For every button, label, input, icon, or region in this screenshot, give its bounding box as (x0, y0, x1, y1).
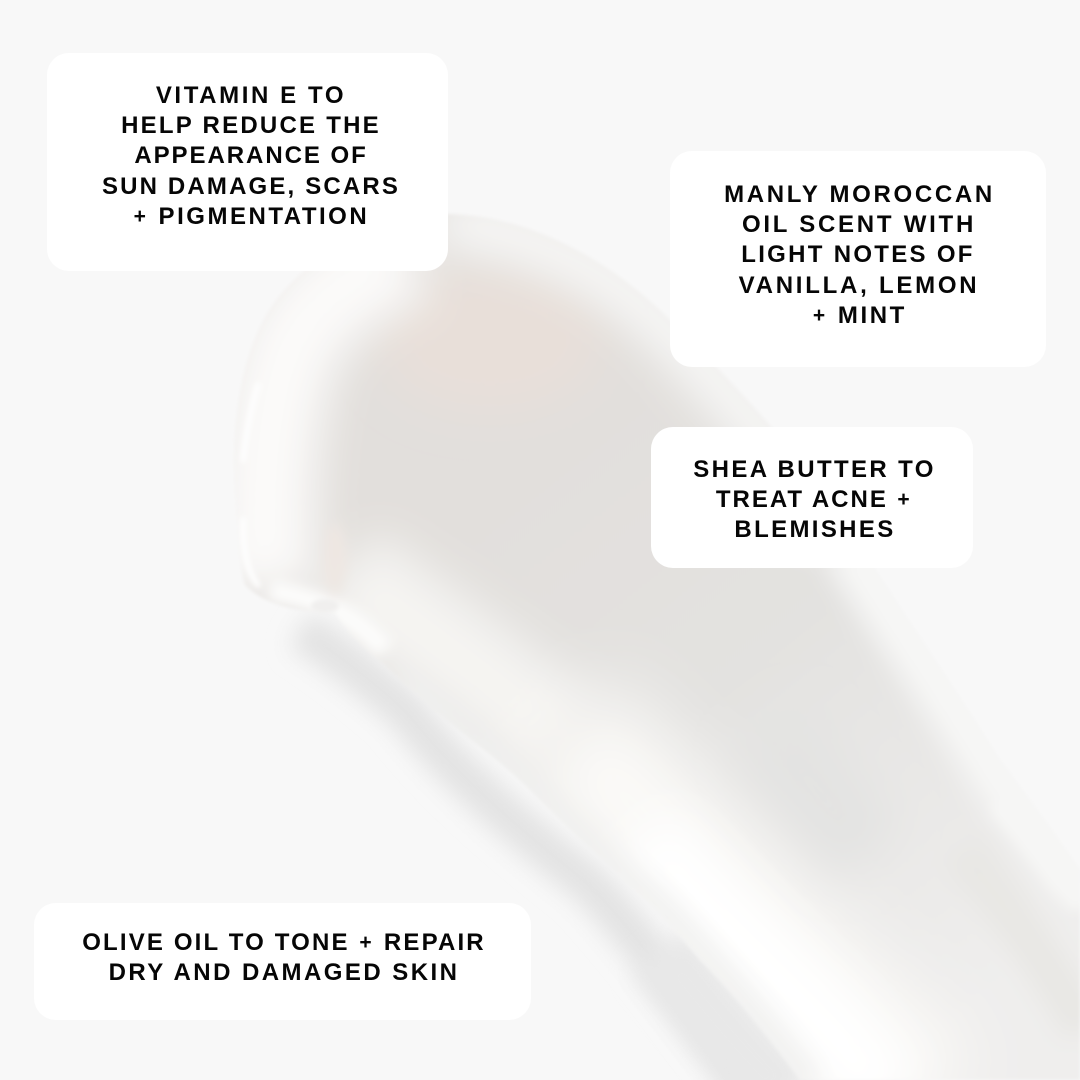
white highlight band (676, 876, 762, 970)
cream swatch (246, 214, 1080, 1080)
card: olive oil (34, 903, 531, 1020)
grey ridge far right (960, 850, 1080, 1030)
card: vitamin E: SUN DAMAGE, SCARS (102, 173, 400, 200)
card: vitamin E: VITAMIN E TO (156, 82, 346, 109)
card: vitamin E: APPEARANCE OF (134, 142, 368, 169)
card: shea butter (651, 427, 973, 568)
body base colour (200, 190, 1080, 1080)
wide pale wash along band (560, 730, 920, 1080)
card: shea butter: + (897, 488, 910, 511)
lighter lower lobe (345, 570, 560, 740)
card: Moroccan oil scent: + (813, 304, 825, 327)
lip lobe white (270, 590, 385, 650)
light wash lower right (1000, 800, 1080, 905)
lower lip gloss (249, 571, 258, 586)
card: Moroccan oil scent: MANLY MOROCCAN (724, 181, 995, 208)
card: vitamin E (47, 53, 448, 271)
cast shadow below swatch (300, 630, 790, 1080)
top rim glow (448, 214, 771, 427)
band above lower edge (642, 886, 732, 984)
right rim glow (828, 568, 1034, 810)
gloss highlight (243, 385, 258, 460)
card: Moroccan oil scent (670, 151, 1046, 367)
card: Moroccan oil scent: VANILLA, LEMON (739, 272, 979, 299)
pink crease (325, 524, 345, 596)
card: olive oil: DRY AND DAMAGED SKIN (109, 959, 459, 986)
notch in lip (311, 599, 339, 613)
card: shea butter: SHEA BUTTER TO (693, 456, 936, 483)
card: olive oil: + (359, 931, 372, 954)
card: shea butter: TREAT ACNE (716, 486, 888, 513)
card: Moroccan oil scent: LIGHT NOTES OF (741, 241, 975, 268)
card: vitamin E: + (134, 205, 146, 228)
light left rim (265, 250, 410, 590)
card: Moroccan oil scent: OIL SCENT WITH (742, 211, 976, 238)
warm tint (380, 270, 600, 410)
swatch body (200, 190, 1080, 1080)
card: shea butter: BLEMISHES (734, 516, 896, 543)
card: Moroccan oil scent: MINT (838, 302, 907, 329)
grey mid band lower right (770, 730, 870, 850)
card: olive oil: OLIVE OIL TO TONE REPAIR (82, 929, 486, 956)
card: vitamin E: PIGMENTATION (159, 203, 369, 230)
card: vitamin E: HELP REDUCE THE (121, 112, 381, 139)
